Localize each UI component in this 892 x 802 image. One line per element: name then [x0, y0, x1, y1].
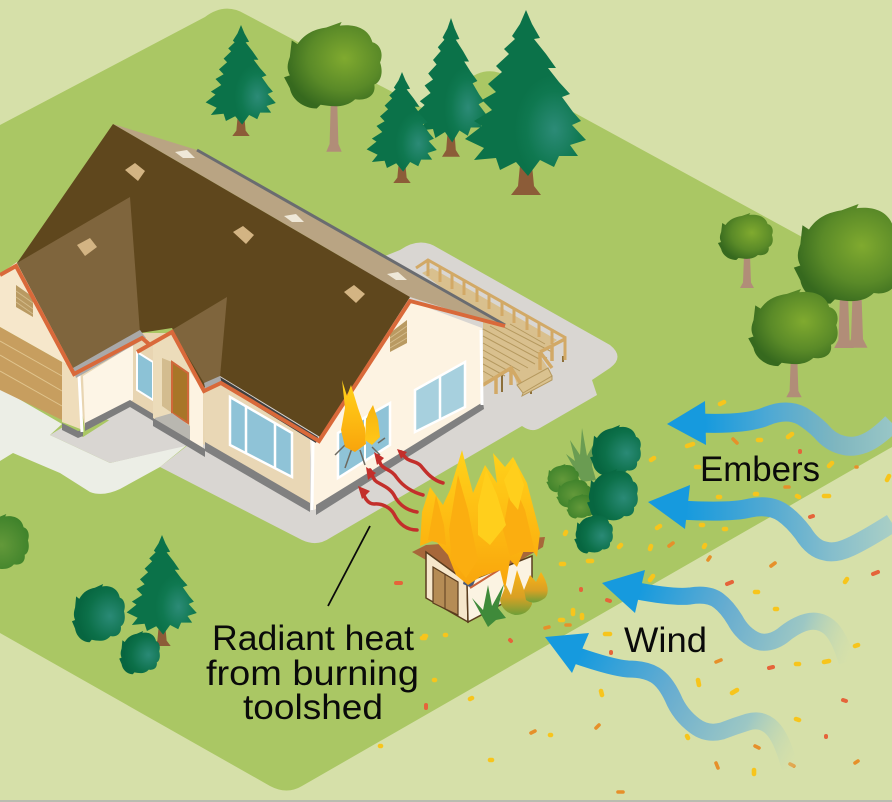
tree: top pine tall	[465, 10, 586, 195]
garage post	[62, 362, 83, 430]
front door	[172, 362, 188, 423]
wind stroke 1	[698, 412, 892, 446]
side window	[137, 352, 153, 400]
heat arrow 1	[362, 491, 417, 530]
bottom edge line	[0, 800, 892, 802]
deck	[416, 260, 566, 396]
roof tan side	[113, 124, 507, 328]
shed side wall	[467, 556, 532, 622]
roof vent 3	[233, 226, 254, 244]
door split	[444, 574, 446, 609]
shed front wall	[426, 552, 468, 622]
back railing	[416, 260, 566, 360]
tree: lower left pine	[127, 535, 197, 646]
light shrub 2	[556, 479, 591, 507]
heat arrow 2	[370, 470, 417, 512]
shrub: dark low	[574, 514, 613, 553]
heat arrowheads	[358, 449, 407, 499]
wind stroke 3	[632, 590, 847, 662]
wind stroke 2	[680, 507, 892, 552]
radiant heat arrows	[358, 449, 443, 530]
deck boards	[483, 324, 552, 379]
shrub: dark mid	[587, 469, 638, 522]
entry patio	[50, 407, 190, 463]
toolshed fire	[420, 450, 540, 590]
entry gable roof plane	[172, 297, 227, 383]
red embers	[396, 451, 878, 737]
garage base	[62, 423, 83, 438]
flame small	[365, 405, 380, 445]
garage door	[0, 327, 62, 420]
heat arrow 4	[401, 452, 443, 483]
vent left	[16, 285, 33, 317]
porch wall	[83, 345, 133, 425]
heat arrow 3	[378, 456, 423, 495]
tree: top pine 2	[367, 72, 437, 183]
roof vent 2	[77, 238, 97, 256]
line 3: toolshed	[243, 688, 383, 727]
front base	[205, 442, 310, 512]
roof gray edge	[197, 150, 505, 325]
eave gray strip left	[73, 330, 146, 378]
darker tongues	[428, 475, 535, 578]
tree: right mid	[748, 289, 838, 366]
tree: top broadleaf	[284, 22, 382, 108]
wind arrow 4	[545, 633, 790, 768]
main fire body	[420, 450, 540, 590]
toolshed	[412, 537, 545, 622]
shrub: left edge	[0, 514, 29, 570]
leader line	[328, 526, 370, 606]
deck stairs	[517, 368, 552, 396]
side window right	[415, 362, 465, 432]
wind arrow 1	[667, 401, 892, 446]
shrub: lower left small	[119, 631, 160, 674]
burning bush 2	[524, 572, 548, 603]
back trunk 1	[834, 300, 854, 348]
roof vents	[77, 163, 365, 303]
front window mullions	[246, 406, 275, 469]
garage door lines	[0, 341, 62, 406]
roof trim	[470, 566, 505, 588]
concrete apron around house	[60, 242, 618, 543]
yellow tongues	[478, 460, 524, 545]
ridge skylights	[175, 150, 407, 280]
light shrub 1	[546, 464, 579, 492]
line 1: Radiant heat	[212, 619, 414, 658]
wind head 4	[545, 633, 589, 673]
wind arrow 3	[602, 570, 847, 662]
entry pillar	[190, 372, 203, 450]
house	[0, 124, 507, 515]
front window	[230, 397, 292, 477]
tree: right back trunks	[834, 295, 868, 348]
tree: right mid trunk	[786, 360, 802, 397]
side base	[316, 402, 484, 515]
label: radiant heat	[206, 619, 419, 727]
vent right slats	[390, 326, 407, 348]
vent right	[390, 320, 407, 352]
main roof	[17, 124, 410, 437]
orange embers	[531, 439, 858, 792]
embers	[380, 402, 889, 792]
burning bush 1	[500, 570, 532, 615]
agave at shed	[472, 584, 506, 627]
house underlay	[73, 333, 205, 445]
tree: right small trunk	[740, 255, 754, 288]
wind head 2	[648, 485, 690, 529]
shed roof edge	[412, 537, 545, 590]
label: embers: Embers	[700, 450, 820, 489]
garage gable wall	[0, 262, 73, 368]
tree: top broadleaf trunk	[326, 105, 342, 152]
entry recess	[162, 358, 172, 413]
tree: top pine 3	[414, 18, 487, 157]
tree: top pine 1	[206, 25, 276, 136]
flame large	[341, 380, 366, 452]
side wall	[310, 301, 483, 510]
front wall	[203, 380, 310, 505]
porch base	[85, 400, 155, 431]
plant: agave by shrubs	[566, 428, 598, 482]
roof vent 1	[125, 163, 145, 181]
tree: right small	[718, 213, 773, 260]
window flames	[335, 380, 385, 468]
wind stroke 4	[575, 655, 790, 768]
wind head 1	[667, 401, 706, 445]
yellow embers	[380, 402, 889, 774]
entry wall	[153, 335, 203, 450]
eave gray strip entry	[204, 376, 222, 392]
left gable roof plane	[17, 197, 140, 368]
roof vent 4	[344, 285, 365, 303]
eave dark strip front	[220, 377, 318, 443]
label: wind: Wind	[624, 621, 707, 660]
entry base	[153, 418, 205, 457]
burning window	[338, 403, 390, 478]
burning window mullion	[364, 417, 366, 462]
shrub: dark top	[590, 425, 641, 476]
side window right mullion	[439, 376, 441, 420]
porch side wall	[133, 342, 158, 416]
back trunk 2	[846, 295, 868, 348]
wind arrow 2	[648, 485, 892, 552]
light shrub 3	[566, 494, 595, 518]
line 2: from burning	[206, 654, 419, 693]
tree: right large	[794, 204, 892, 304]
shrub: lower left large	[72, 584, 125, 642]
deck posts	[502, 356, 563, 394]
wind head 3	[602, 570, 645, 613]
roof trim orange	[0, 266, 505, 441]
shed door	[433, 567, 458, 615]
downspouts	[79, 330, 482, 510]
front walk and driveway	[0, 388, 187, 494]
vent left slats	[16, 291, 33, 314]
deck rail front	[483, 339, 565, 394]
window crack star	[335, 438, 385, 468]
roof blue gap	[463, 575, 476, 588]
shrub: light green cluster	[546, 464, 595, 518]
deck floor	[422, 268, 557, 387]
entry step	[155, 413, 190, 442]
